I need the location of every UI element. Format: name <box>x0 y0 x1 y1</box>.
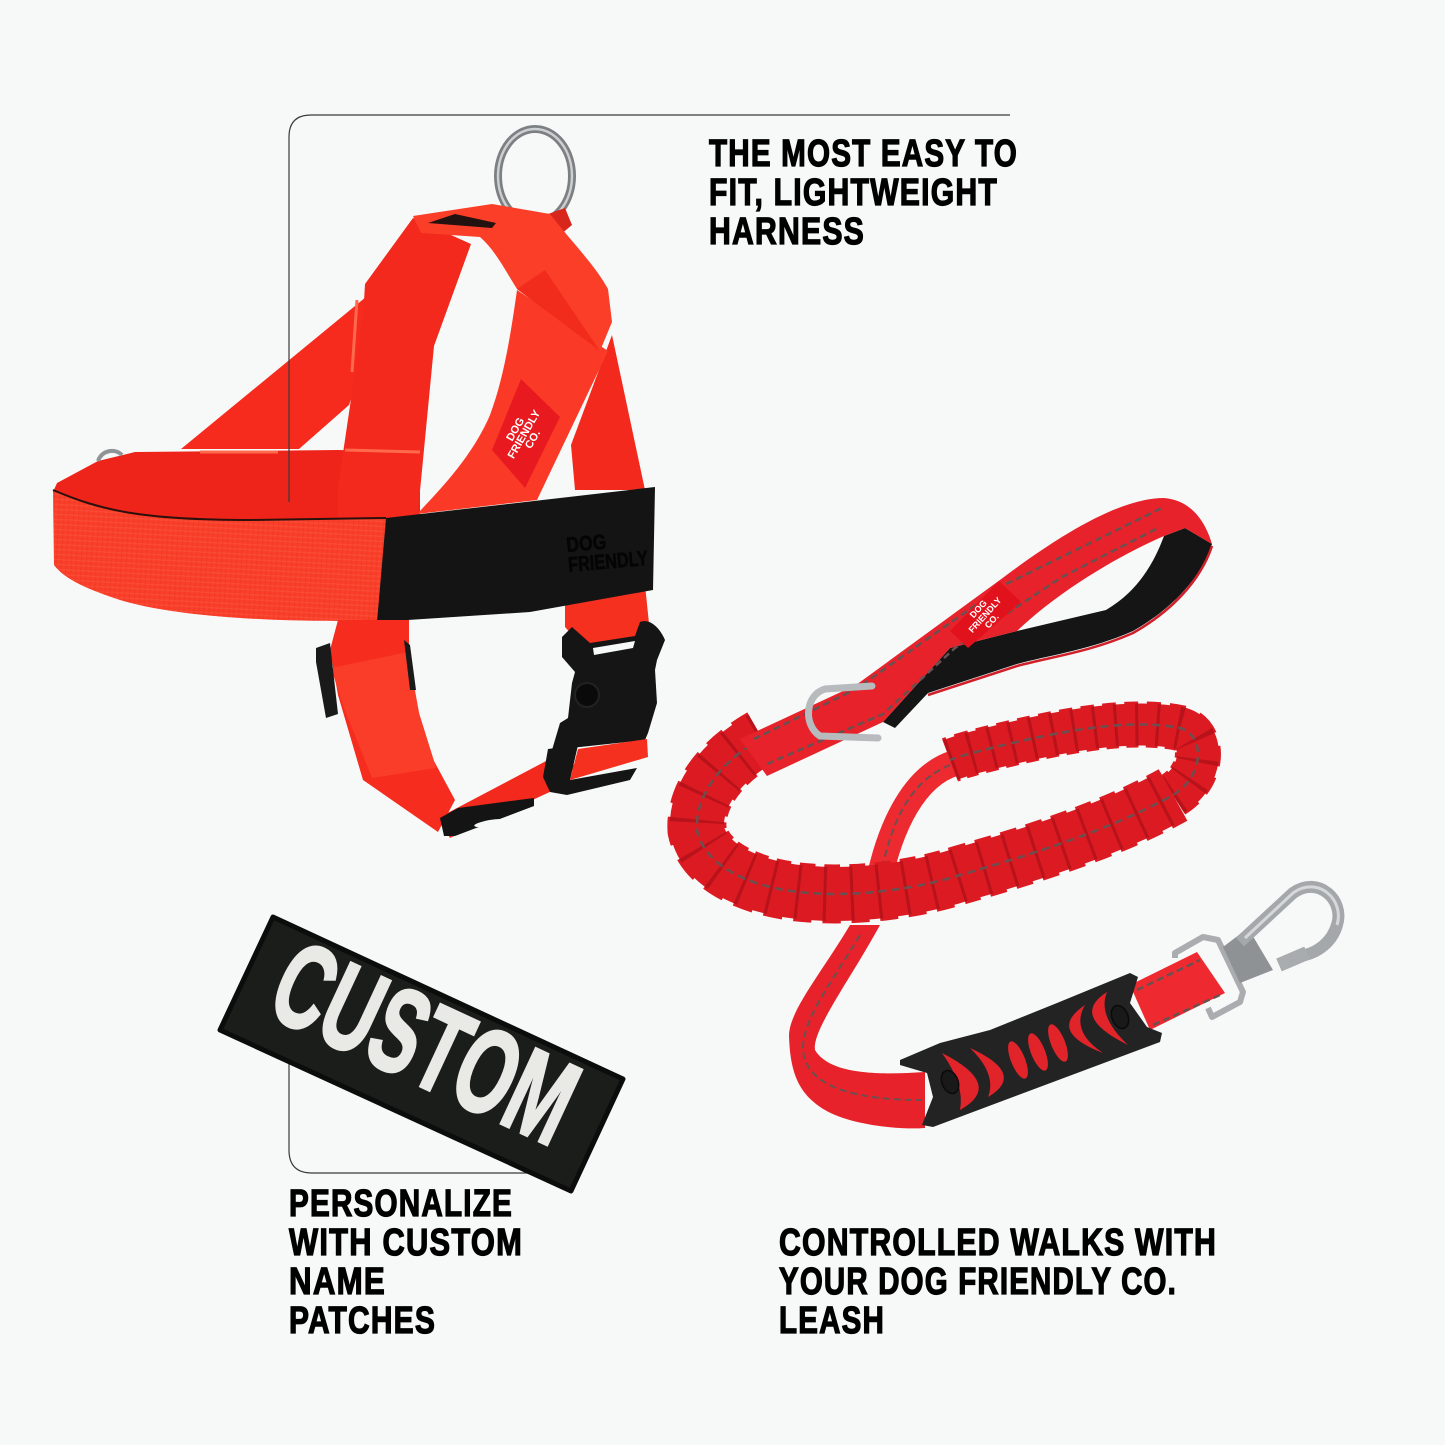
patch body <box>220 917 623 1191</box>
flat strap upper <box>878 763 955 885</box>
band top edge shadow <box>53 490 386 520</box>
rubber grip <box>900 973 1162 1127</box>
label: dog friendly tag: FRIENDLY <box>506 408 543 461</box>
callout line: harness <box>289 115 1010 502</box>
handle label: FRIENDLY <box>967 595 1003 635</box>
flat strap stitching lower <box>803 935 922 1100</box>
patch text: CUSTOM <box>253 915 597 1171</box>
strap tab at ring <box>548 208 572 235</box>
label: dog friendly tag: CO. <box>523 428 543 451</box>
flat strap stitching upper <box>880 765 950 880</box>
label: dog friendly tag: DOG <box>504 416 527 443</box>
snap hook <box>1175 887 1338 1017</box>
bungee upper run <box>950 724 1198 795</box>
name patch <box>220 915 623 1191</box>
callout line: patch <box>289 1050 530 1173</box>
text: patch caption: PATCHES <box>289 1300 436 1342</box>
icon: leash D-ring <box>809 686 878 738</box>
handle stitching <box>754 507 1164 764</box>
text: harness caption: HARNESS <box>709 211 865 253</box>
text: leash caption: YOUR DOG FRIENDLY CO. <box>779 1261 1177 1303</box>
icon: steel D-ring <box>498 129 572 223</box>
strap under the buckle <box>438 760 575 838</box>
inner side of the belly band <box>53 450 420 524</box>
text: patch caption: WITH CUSTOM <box>289 1222 523 1264</box>
diagonal back strap <box>181 292 372 449</box>
black patch: DOG <box>565 531 607 557</box>
text: harness caption <box>709 133 1018 253</box>
handle label: CO. <box>983 612 1001 630</box>
black patch <box>377 487 655 622</box>
text: leash caption: CONTROLLED WALKS WITH <box>779 1222 1217 1264</box>
black patch: FRIENDLY <box>567 547 649 577</box>
patch border stitching <box>220 917 623 1191</box>
black buckle <box>543 621 665 795</box>
slot in the top piece <box>428 214 496 228</box>
text: harness caption: THE MOST EASY TO <box>709 133 1018 175</box>
black left slider <box>316 643 338 718</box>
text: patch caption: NAME <box>289 1261 386 1303</box>
wide strap with label <box>417 290 608 514</box>
text: patch caption <box>289 1183 523 1342</box>
belly band front <box>53 490 386 621</box>
grip end ovals <box>938 1068 962 1096</box>
rear strap behind the patch <box>571 335 645 490</box>
handle strap <box>740 498 1212 776</box>
strap to clip <box>1130 952 1225 1030</box>
leash <box>697 498 1338 1128</box>
handle lining rim <box>928 546 1212 695</box>
lower strap from band <box>330 620 455 832</box>
lower strap lighter panel <box>331 652 436 778</box>
grip cut-outs <box>942 992 1128 1110</box>
black handle lining <box>883 528 1212 728</box>
small ring at band end <box>98 451 122 461</box>
text: harness caption: FIT, LIGHTWEIGHT <box>709 172 998 214</box>
black right slider <box>404 640 416 690</box>
vertical chest strap <box>338 218 471 522</box>
text: patch caption: PERSONALIZE <box>289 1183 513 1225</box>
text: leash caption: LEASH <box>779 1300 885 1342</box>
flat strap lower <box>789 925 925 1128</box>
strap fold shadow <box>517 270 600 351</box>
strap above buckle <box>565 585 650 655</box>
bungee lower run <box>697 738 1173 894</box>
text: leash caption <box>779 1222 1217 1342</box>
label: dog friendly tag <box>492 379 560 488</box>
black strap end piece <box>440 798 534 836</box>
handle label <box>950 581 1021 648</box>
handle label: DOG <box>968 598 989 620</box>
top cross piece <box>413 204 612 351</box>
strap seam highlights <box>200 300 420 452</box>
harness <box>53 129 665 838</box>
